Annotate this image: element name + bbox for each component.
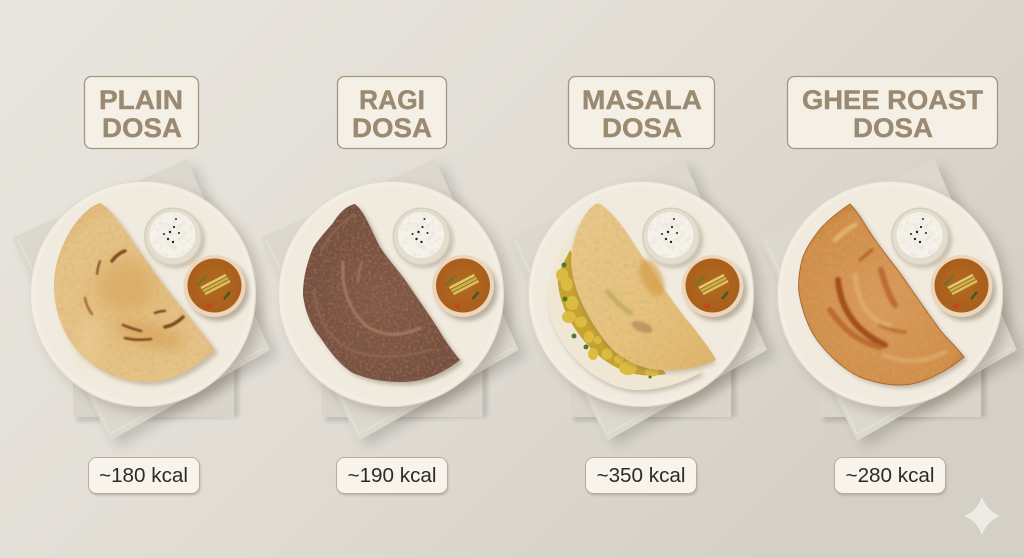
potato filling — [556, 250, 666, 378]
plate — [528, 181, 761, 413]
heading: plain dosa — [84, 76, 198, 148]
heading: masala dosa — [568, 76, 714, 148]
masala dosa crepe with potato filling — [548, 203, 716, 393]
heading: masala dosa: DOSA — [602, 113, 682, 143]
heading: ragi dosa — [338, 76, 446, 148]
plate — [278, 181, 511, 413]
side bowls: chutney and sambar — [392, 208, 498, 321]
napkin — [12, 159, 278, 447]
plate — [30, 181, 263, 413]
calorie label: ~350 kcal — [596, 465, 686, 487]
panel: ghee roast dosa — [759, 76, 1024, 496]
calorie label — [88, 458, 200, 496]
heading: masala dosa: MASALA — [582, 85, 702, 115]
panel: ragi dosa — [260, 76, 526, 496]
napkin — [509, 159, 775, 447]
panel: masala dosa — [509, 76, 775, 496]
plate — [777, 181, 1010, 413]
panel: plain dosa — [12, 76, 278, 496]
calorie label — [336, 458, 448, 496]
napkin — [759, 159, 1024, 447]
calorie label: ~190 kcal — [348, 465, 436, 487]
icon: sparkle watermark — [964, 497, 1000, 535]
heading: ragi dosa: RAGI — [359, 85, 425, 115]
calorie label: ~180 kcal — [99, 465, 188, 487]
plain dosa crepe — [54, 203, 218, 385]
calorie label: ~280 kcal — [846, 465, 934, 487]
heading: ghee roast dosa: DOSA — [853, 113, 933, 143]
calorie label — [834, 458, 946, 496]
side bowls: chutney and sambar — [642, 208, 747, 321]
heading: ghee roast dosa: GHEE ROAST — [802, 85, 984, 115]
ghee roast dosa crepe — [799, 204, 967, 388]
heading: ragi dosa: DOSA — [352, 113, 432, 143]
side bowls: chutney and sambar — [144, 208, 249, 321]
heading: plain dosa: PLAIN — [99, 85, 183, 115]
napkin — [260, 159, 526, 447]
heading: plain dosa: DOSA — [102, 113, 182, 143]
heading: ghee roast dosa — [788, 76, 998, 148]
ragi dosa crepe — [303, 204, 463, 385]
calorie label — [586, 458, 698, 496]
side bowls: chutney and sambar — [891, 208, 996, 321]
